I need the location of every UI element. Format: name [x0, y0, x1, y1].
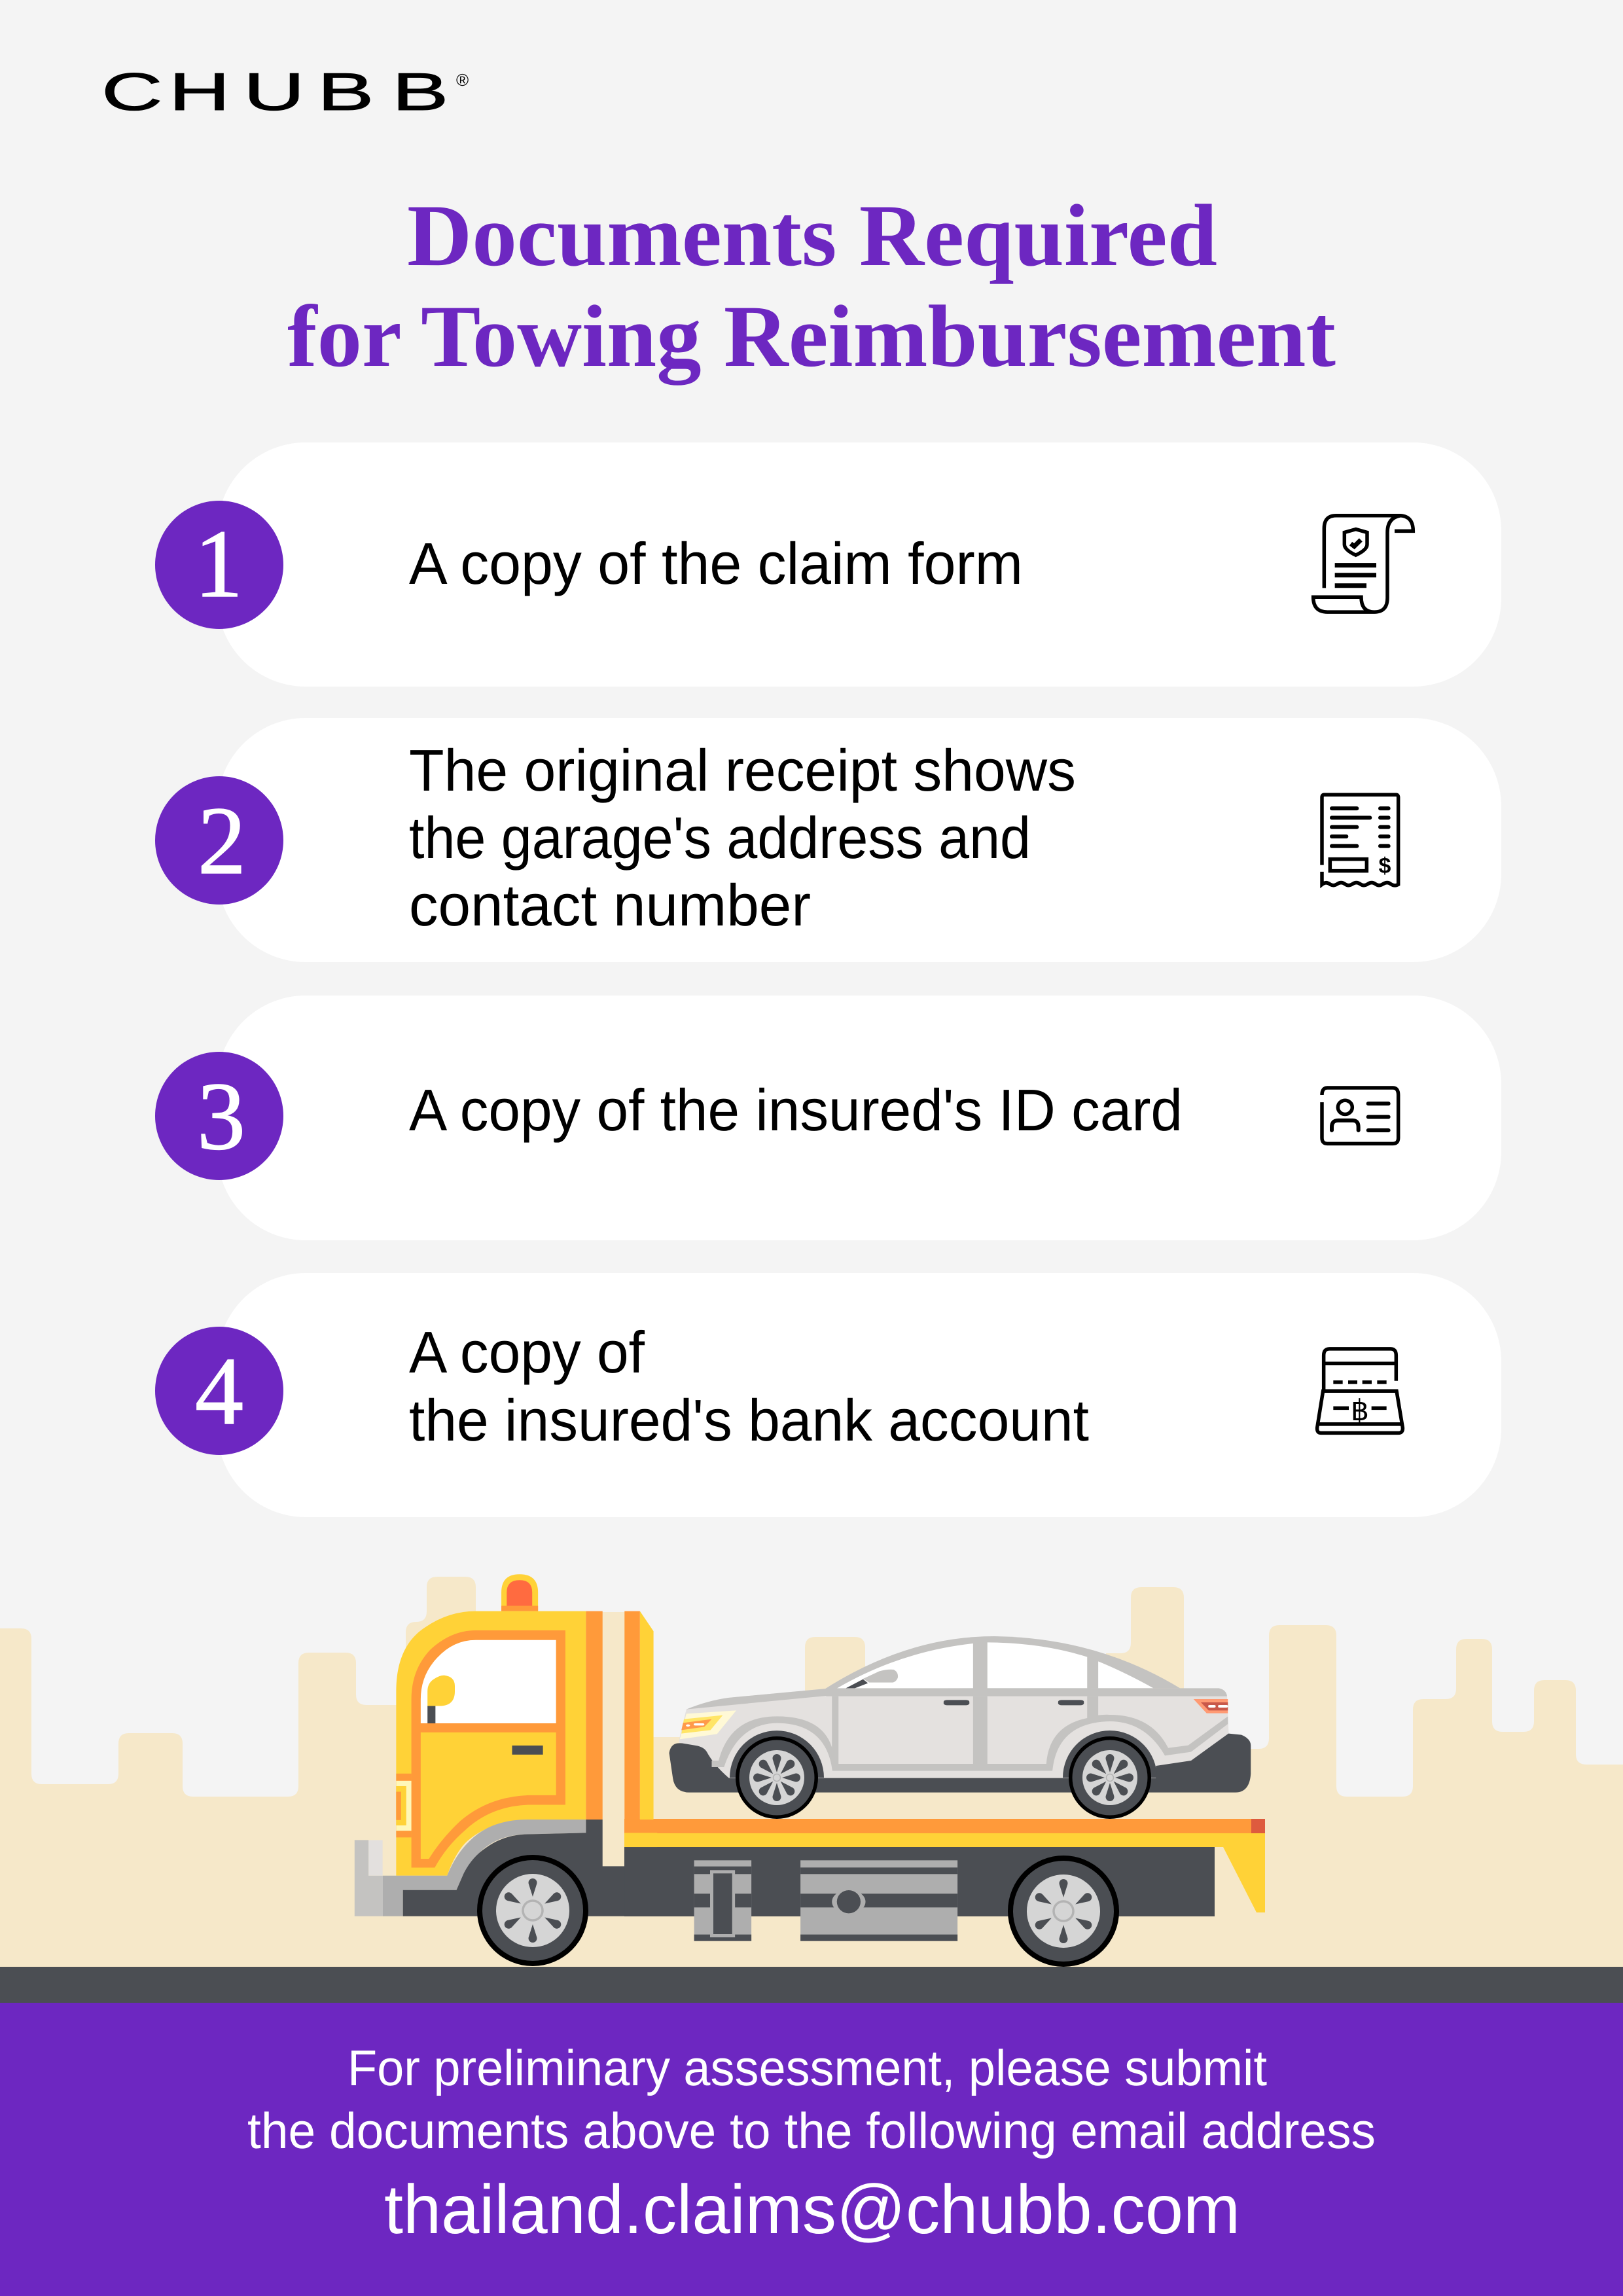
text: item 4: the insured's bank account: [409, 1388, 1089, 1454]
icon: bank book: [1317, 1349, 1402, 1433]
text: item 2: The original receipt shows: [409, 738, 1076, 804]
truck front wheel: [477, 1855, 588, 1966]
logo: CHUBB: B: [392, 63, 448, 122]
icon: receipt: $: [1379, 853, 1391, 878]
car wheel arches: [730, 1731, 1157, 1778]
logo: CHUBB: H: [169, 63, 230, 122]
number badge 1: [155, 501, 283, 629]
car rear wheel: [736, 1736, 818, 1819]
text: item 3: A copy of the insured's ID card: [409, 1078, 1183, 1143]
road: [0, 1967, 1623, 2003]
text: item 1: A copy of the claim form: [409, 531, 1023, 597]
footer email address: thailand.claims@chubb.com: [384, 2171, 1240, 2248]
number badge 2: [155, 776, 283, 905]
number badge 3: [155, 1052, 283, 1180]
fuel tanks: [694, 1860, 957, 1941]
truck cab: [355, 1574, 657, 1916]
panel: item 2 receipt: [155, 718, 1501, 962]
icon: bank book: ฿: [1351, 1394, 1369, 1427]
number badge 1: 1: [194, 511, 243, 618]
number badge 4: [155, 1327, 283, 1455]
text: item 4: A copy of: [409, 1320, 645, 1386]
logo: CHUBB: [101, 63, 469, 122]
beacon light: [501, 1574, 538, 1611]
text: item 2: the garage's address and: [409, 806, 1031, 871]
panel: item 3 ID card: [155, 996, 1501, 1240]
number badge 3: 3: [197, 1063, 245, 1170]
panel: item 4 bank account: [155, 1273, 1501, 1517]
title: Documents Required: [407, 187, 1217, 285]
text: item 4: [409, 1320, 1089, 1454]
title: [287, 187, 1336, 386]
footer panel: [0, 2003, 1623, 2296]
number badge 4: 4: [195, 1338, 243, 1445]
logo: CHUBB: U: [243, 63, 305, 122]
icon: claim form scroll: [1313, 516, 1413, 612]
footer text: [247, 2040, 1376, 2159]
text: item 2: contact number: [409, 873, 811, 939]
icon: ID card: [1322, 1088, 1399, 1143]
car on the flatbed: [669, 1636, 1251, 1819]
title: for Towing Reimbursement: [287, 288, 1336, 386]
truck rear wheel: [1008, 1856, 1119, 1967]
number badge 2: 2: [198, 787, 246, 895]
logo: CHUBB: ®: [456, 70, 469, 90]
logo: CHUBB: C: [101, 63, 163, 122]
footer text: the documents above to the following email address: [247, 2103, 1376, 2159]
car body: [669, 1636, 1251, 1793]
truck chassis and deck: [624, 1819, 1265, 1916]
logo: CHUBB: B: [317, 63, 374, 122]
icon: receipt: [1322, 795, 1399, 886]
car front wheel: [1069, 1736, 1151, 1819]
panel: item 1 claim form: [155, 442, 1501, 687]
text: item 2: [409, 738, 1076, 939]
tow truck: [355, 1574, 1265, 1967]
footer text: For preliminary assessment, please submit: [348, 2040, 1267, 2096]
city skyline background: [0, 1577, 1623, 1970]
